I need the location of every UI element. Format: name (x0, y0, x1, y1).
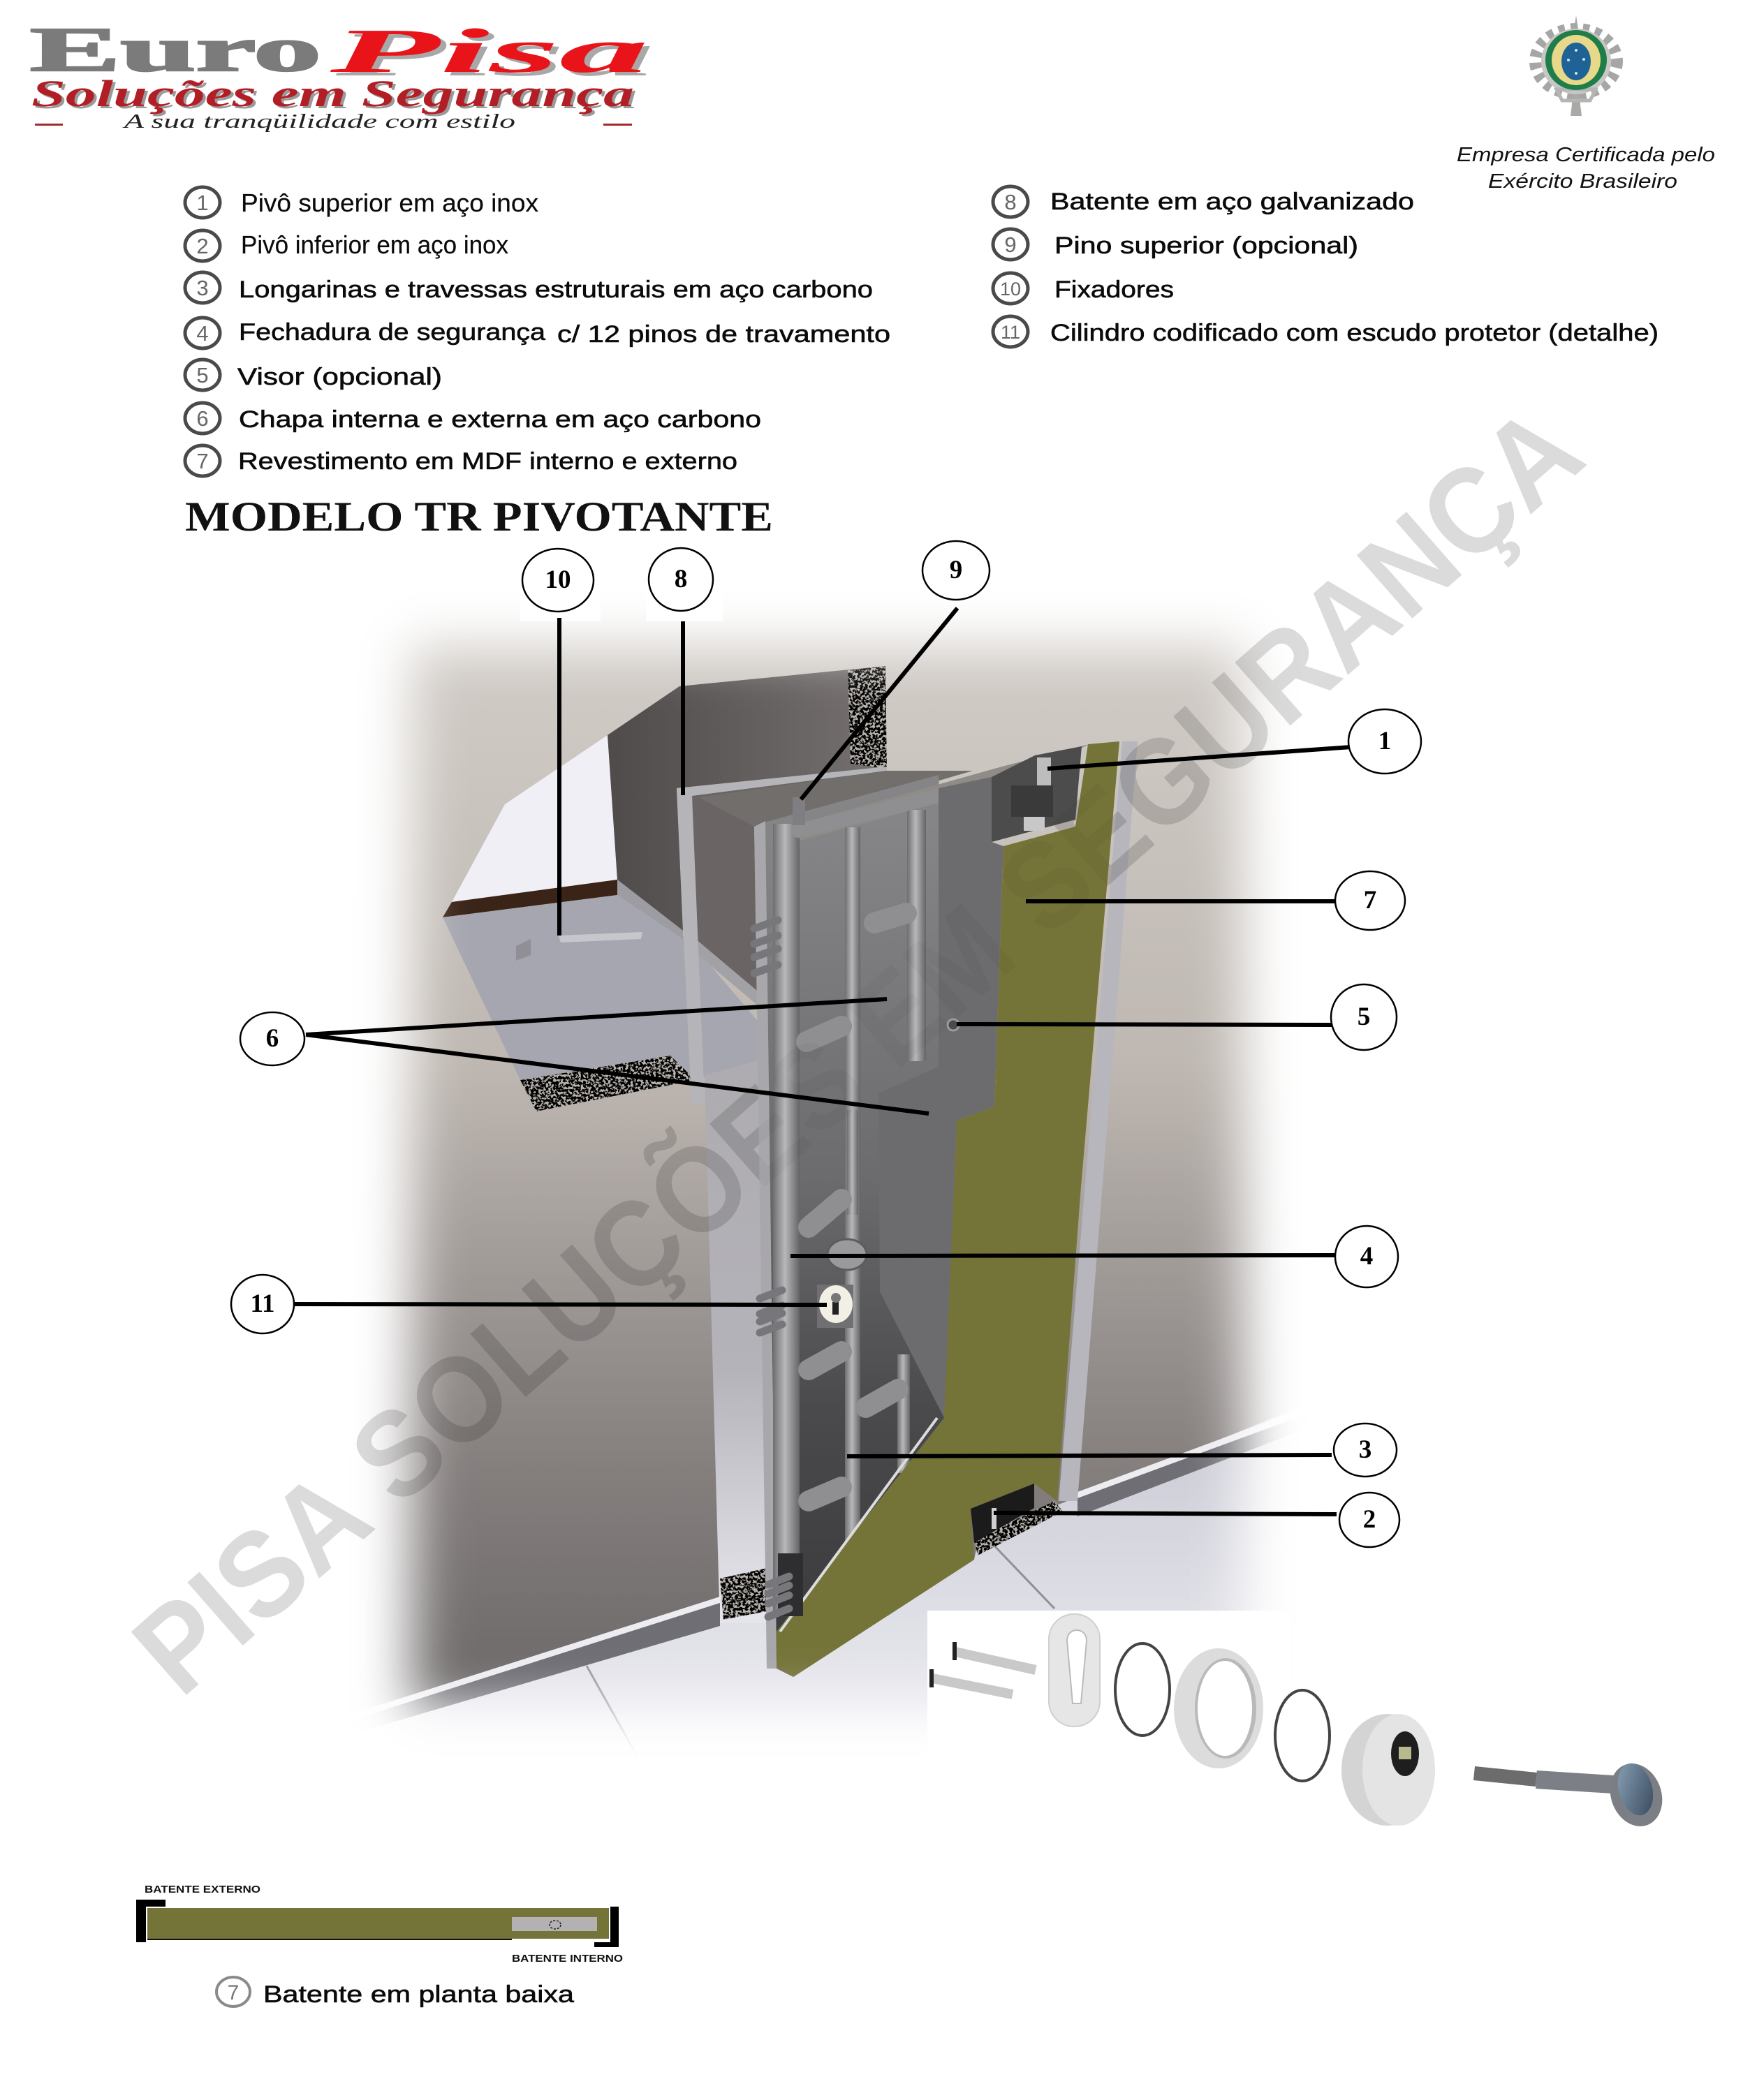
caption: batente em planta baixa: Batente em planta baixa (263, 1981, 574, 2008)
mdf edge highlight (780, 1418, 937, 1632)
legend item 4: Fechadura de segurança (239, 319, 545, 346)
callout 6: chapa: 6 (266, 1024, 279, 1053)
text: army certification: Empresa Certificada pelo (1457, 144, 1715, 166)
legend item 4: c/ 12 pinos de travamento (557, 321, 890, 348)
bolts (754, 920, 803, 1617)
legend item 9 (993, 229, 1358, 260)
batente: door frame left (677, 767, 887, 1103)
legend item 11: 11 (1001, 322, 1020, 343)
callout 1: pivô superior: 1 (1378, 727, 1391, 755)
callout 5: visor: 5 (1358, 1003, 1370, 1031)
detail background (927, 1611, 1291, 1778)
lock plate plan (512, 1917, 597, 1931)
logo: EuroPisa: Pisa (334, 20, 654, 89)
legend item 8 (993, 186, 1414, 217)
frame label: externo: BATENTE EXTERNO (145, 1884, 260, 1895)
callout 10: fixadores (520, 548, 601, 936)
door illustration scene (372, 619, 1284, 1745)
callout 2: pivô inferior: 2 (1363, 1505, 1376, 1534)
mdf panel plan (147, 1908, 609, 1939)
text: army certification (1457, 144, 1715, 193)
plan view of frame (136, 1884, 623, 1965)
view through opening (443, 666, 887, 1111)
legend item 7 (185, 445, 737, 476)
callout 6: chapa (240, 999, 929, 1114)
callout 1: pivô superior (1047, 709, 1421, 774)
logo: EuroPisa: Soluções em Segurança (31, 73, 634, 114)
legend item 7: 7 (196, 449, 209, 473)
door body (754, 741, 1119, 1677)
icon: Brazilian Army emblem (1536, 15, 1617, 116)
o-ring 1 (1115, 1643, 1170, 1736)
legend item 10: Fixadores (1054, 276, 1174, 303)
callout 11: cilindro: 11 (251, 1289, 274, 1318)
callout 7: revestimento: 7 (1364, 886, 1376, 915)
callout 10: fixadores: 10 (545, 565, 571, 594)
callout 3: longarinas: 3 (1359, 1435, 1371, 1464)
door top face (798, 744, 1089, 841)
glass side area (705, 1061, 766, 1623)
legend item 10: 10 (1000, 279, 1021, 300)
legend item 6 (185, 403, 761, 434)
callout 8: batente (646, 548, 723, 795)
callout 8: batente: 8 (675, 565, 687, 593)
legend item 8: Batente em aço galvanizado (1050, 188, 1414, 215)
legend item 1: Pivô superior em aço inox (241, 188, 538, 217)
cylinder shield (1341, 1714, 1435, 1826)
frame label: interno: BATENTE INTERNO (512, 1953, 623, 1965)
legend item 8: 8 (1004, 190, 1017, 214)
door frame right (1059, 741, 1138, 1501)
granite by pivot (974, 1501, 1063, 1555)
pino superior (793, 797, 805, 825)
legend item 2: 2 (196, 234, 209, 258)
caption: batente em planta baixa: 7 (228, 1981, 239, 2004)
door inner panel (764, 775, 957, 1632)
bezel ring (1174, 1648, 1263, 1768)
legend item 3: 3 (196, 276, 209, 300)
callout 11: cilindro (231, 1275, 827, 1333)
cylinder mark (550, 1921, 561, 1929)
bottom pivot notch (971, 1484, 1034, 1543)
visor (948, 1019, 959, 1030)
top pivot box (992, 746, 1082, 842)
legend item 3: Longarinas e travessas estruturais em aço carbono (239, 276, 873, 303)
legend item 4 (185, 318, 890, 348)
outer sheet (878, 777, 1003, 1418)
watermark faint over door: PISA SOLUÇÕES EM SEGURANÇA (108, 380, 1607, 1720)
legend item 7: Revestimento em MDF interno e externo (238, 448, 737, 475)
callout 3: longarinas (847, 1424, 1397, 1477)
legend: parts 1 to 7 (185, 187, 890, 476)
logo: EuroPisa: A sua tranqüilidade com estilo (122, 110, 515, 133)
escutcheon plate (1049, 1614, 1100, 1726)
legend item 3 (185, 272, 873, 303)
title: MODELO TR PIVOTANTE (185, 494, 773, 540)
o-ring 2 (1275, 1690, 1330, 1781)
legend item 9: Pino superior (opcional) (1054, 232, 1358, 259)
logo: EuroPisa: Soluções em Segurança (34, 75, 637, 117)
legend item 6: 6 (196, 406, 209, 431)
callout 9: pino superior (801, 541, 990, 799)
mdf lining (777, 741, 1119, 1677)
caption: batente em planta baixa (216, 1977, 574, 2008)
legend item 1: 1 (196, 191, 209, 215)
legend item 9: 9 (1004, 232, 1017, 257)
text: army certification: Exército Brasileiro (1488, 170, 1677, 193)
legend item 2: Pivô inferior em aço inox (241, 230, 508, 259)
legend item 11 (993, 316, 1659, 347)
callout 2: pivô inferior (994, 1493, 1399, 1547)
legend item 5: Visor (opcional) (237, 364, 442, 390)
floor (391, 1417, 1280, 1749)
bracket: batente externo (136, 1900, 166, 1942)
watermark over walls: PISA SOLUÇÕES EM SEGURANÇA (108, 380, 1607, 1720)
watermark on white background: PISA SOLUÇÕES EM SEGURANÇA (108, 380, 1607, 1720)
legend item 5 (185, 360, 442, 390)
legend item 5: 5 (196, 363, 209, 387)
baseboard left (381, 1597, 720, 1723)
callout 4: fechadura (790, 1226, 1398, 1287)
crossbars (798, 796, 939, 1501)
key (1474, 1756, 1671, 1834)
legend item 6: Chapa interna e externa em aço carbono (239, 406, 761, 433)
door edge strip (754, 821, 777, 1669)
legend item 4: 4 (196, 321, 209, 346)
baseboard right (1078, 1425, 1278, 1516)
callout 7: revestimento (1026, 871, 1405, 930)
callout 9: pino superior: 9 (950, 556, 962, 584)
callout 5: visor (957, 984, 1397, 1050)
bracket: batente interno (594, 1907, 619, 1947)
logo: EuroPisa (30, 15, 654, 133)
lock knob (828, 1239, 867, 1270)
legend: parts 8 to 11 (993, 186, 1659, 347)
logo: EuroPisa: Euro (30, 15, 321, 84)
logo: EuroPisa: Pisa (328, 17, 649, 86)
cylinder with escutcheon (817, 1285, 853, 1328)
callout 4: fechadura: 4 (1360, 1242, 1373, 1271)
legend item 11: Cilindro codificado com escudo protetor (detalhe) (1050, 320, 1659, 346)
steel core line (147, 1939, 512, 1940)
cylinder exploded detail (927, 1611, 1671, 1834)
granite threshold (720, 1568, 766, 1620)
wall background (372, 619, 1281, 1705)
screws (929, 1642, 1036, 1694)
door top wedge (698, 771, 973, 827)
legend item 10 (993, 273, 1174, 304)
rails (773, 810, 926, 1613)
